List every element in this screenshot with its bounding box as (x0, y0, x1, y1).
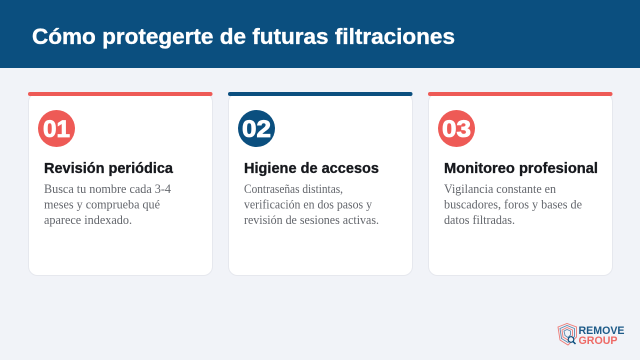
body text (244, 182, 379, 227)
number badge 02: 02 (242, 116, 271, 143)
body text: buscadores, foros y bases de (444, 198, 582, 212)
title: Cómo protegerte de futuras filtraciones (32, 24, 455, 49)
icon: striped shield with magnifier (558, 324, 576, 345)
body text (44, 182, 172, 227)
heading: Monitoreo profesional (444, 161, 598, 177)
logo: remove group: GROUP (578, 335, 618, 347)
body text: verificación en dos pasos y (244, 198, 373, 212)
body text: aparece indexado. (44, 213, 132, 227)
body text: revisión de sesiones activas. (244, 213, 379, 227)
number badge 02 (238, 110, 275, 147)
body text (444, 182, 582, 227)
panel: higiene de accesos (228, 92, 412, 276)
number badge 01 (38, 110, 75, 147)
header band (0, 0, 640, 68)
heading: Revisión periódica (44, 161, 174, 177)
heading: Higiene de accesos (244, 161, 379, 177)
body text: Vigilancia constante en (444, 182, 557, 196)
panel: revisión periódica (28, 92, 212, 276)
body text: Contraseñas distintas, (244, 182, 343, 196)
logo wordmark: REMOVE (578, 325, 624, 337)
body text: meses y comprueba qué (44, 198, 160, 212)
number badge 01: 01 (43, 116, 70, 143)
panel: monitoreo profesional (428, 92, 612, 276)
logo: remove group (558, 324, 624, 347)
body text: datos filtradas. (444, 213, 515, 227)
body text: Busca tu nombre cada 3-4 (44, 182, 172, 196)
number badge 03 (438, 110, 475, 147)
number badge 03: 03 (442, 116, 471, 143)
